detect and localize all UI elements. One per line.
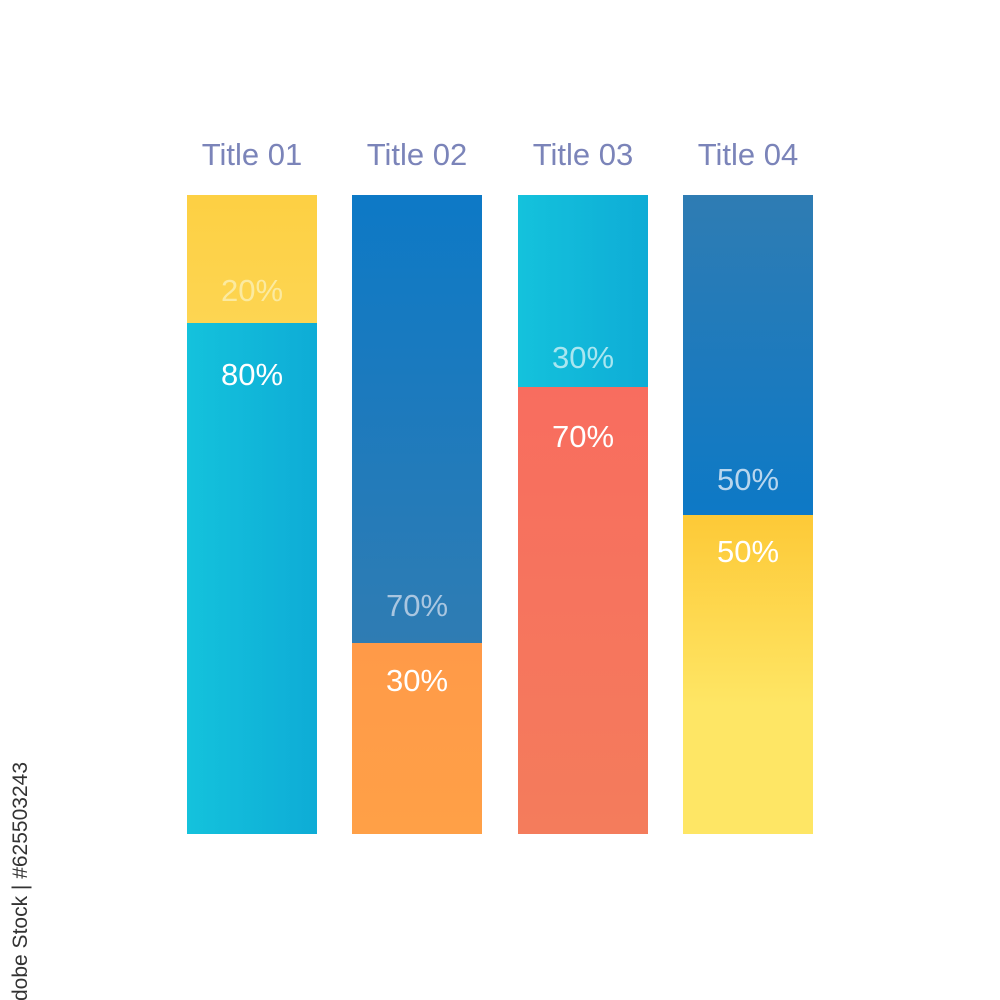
bar 2 xyxy=(352,195,482,834)
label 80%: 80% xyxy=(221,357,283,392)
label 70%: 70% xyxy=(552,419,614,454)
title 02: Title 02 xyxy=(367,137,467,172)
label 50% top: 50% xyxy=(717,462,779,497)
bar 3 xyxy=(518,195,648,834)
title 04: Title 04 xyxy=(698,137,798,172)
label 30%: 30% xyxy=(386,663,448,698)
title 03: Title 03 xyxy=(533,137,633,172)
label 20%: 20% xyxy=(221,273,283,308)
title 01: Title 01 xyxy=(202,137,302,172)
label 50% bottom: 50% xyxy=(717,534,779,569)
bar 4 xyxy=(683,195,813,834)
label 70%: 70% xyxy=(386,588,448,623)
bar 1 xyxy=(187,195,317,834)
label 30%: 30% xyxy=(552,340,614,375)
